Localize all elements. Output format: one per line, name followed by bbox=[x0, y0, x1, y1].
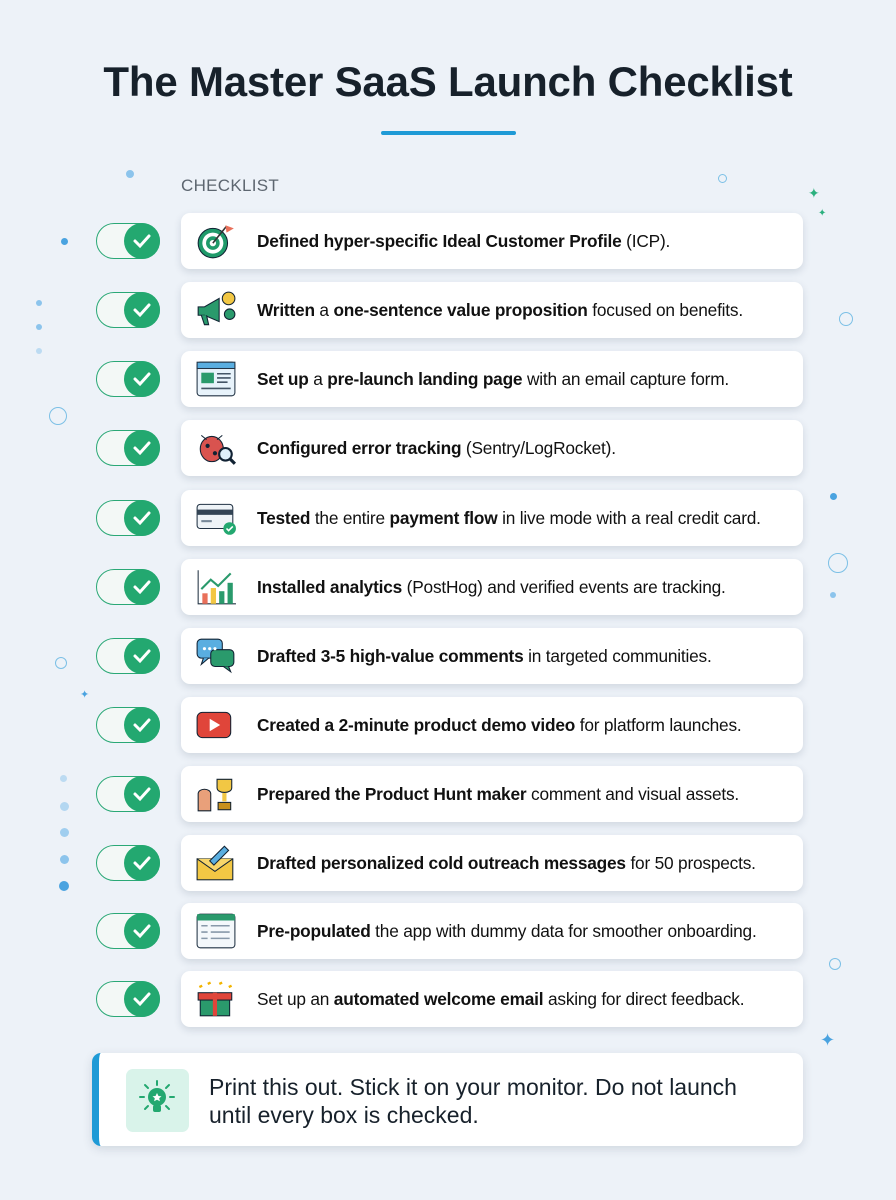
callout text: until every box is checked. bbox=[209, 1102, 479, 1128]
row 2 bbox=[96, 282, 806, 344]
row 1 bbox=[96, 213, 806, 274]
callout text: Print this out. Stick it on your monitor. Do not launch bbox=[209, 1074, 737, 1100]
text: ✦ bbox=[818, 208, 826, 219]
callout bbox=[92, 1053, 803, 1146]
callout text bbox=[209, 1074, 737, 1128]
row 7 bbox=[96, 628, 806, 690]
row 5: Tested the entire payment flow in live mode with a real credit card. bbox=[257, 508, 761, 528]
icon: lightbulb bbox=[126, 1069, 189, 1132]
row 4 bbox=[96, 420, 806, 482]
row 4: Configured error tracking (Sentry/LogRocket). bbox=[257, 438, 616, 458]
row 11 bbox=[96, 903, 806, 964]
row 10: Drafted personalized cold outreach messages for 50 prospects. bbox=[257, 853, 756, 873]
row 6 bbox=[96, 559, 806, 620]
section label: CHECKLIST bbox=[181, 176, 279, 195]
text: ✦ bbox=[80, 689, 89, 701]
row 5 bbox=[96, 490, 806, 552]
row 1: Defined hyper-specific Ideal Customer Profile (ICP). bbox=[257, 231, 670, 251]
row 7: Drafted 3-5 high-value comments in targeted communities. bbox=[257, 646, 712, 666]
row 2: Written a one-sentence value proposition focused on benefits. bbox=[257, 300, 743, 320]
row 12 bbox=[96, 971, 806, 1032]
title: The Master SaaS Launch Checklist bbox=[103, 58, 793, 105]
row 9 bbox=[96, 766, 806, 828]
row 9: Prepared the Product Hunt maker comment and visual assets. bbox=[257, 784, 739, 804]
row 11: Pre-populated the app with dummy data for smoother onboarding. bbox=[257, 921, 757, 941]
row 10 bbox=[96, 835, 806, 896]
row 8 bbox=[96, 697, 806, 758]
row 6: Installed analytics (PostHog) and verified events are tracking. bbox=[257, 577, 726, 597]
row 3: Set up a pre-launch landing page with an email capture form. bbox=[257, 369, 729, 389]
text: ✦ bbox=[808, 185, 820, 201]
row 12: Set up an automated welcome email asking for direct feedback. bbox=[257, 989, 744, 1009]
row 8: Created a 2-minute product demo video for platform launches. bbox=[257, 715, 742, 735]
text: ✦ bbox=[820, 1030, 835, 1050]
row 3 bbox=[96, 351, 806, 412]
